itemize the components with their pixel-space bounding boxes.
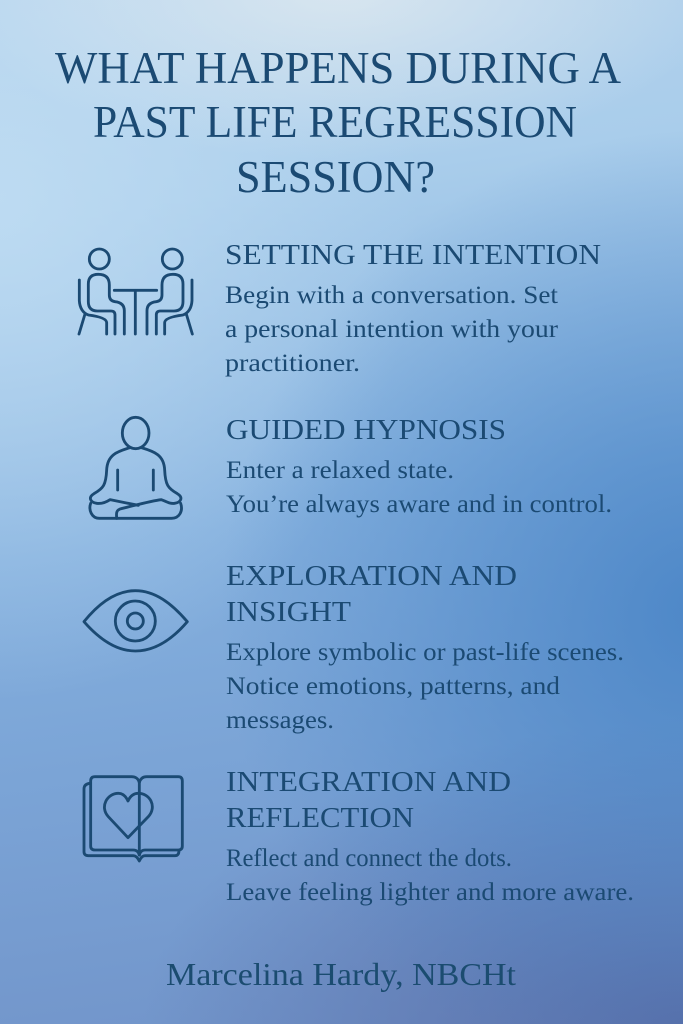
title: PAST LIFE REGRESSION [93, 97, 577, 147]
panel: setting the intention [79, 240, 601, 377]
text: exploration description: Notice emotions, patterns, and [226, 671, 560, 700]
icon: two people at a table [79, 249, 192, 334]
text: exploration description: Explore symbolic or past-life scenes. [226, 637, 624, 666]
text: setting the intention description: a personal intention with your [225, 314, 559, 343]
heading: integration and reflection: INTEGRATION AND [226, 767, 511, 798]
panel: guided hypnosis [90, 415, 612, 518]
text: setting the intention description [225, 280, 559, 377]
text: exploration description [226, 637, 624, 734]
text: setting the intention description: Begin with a conversation. Set [225, 280, 558, 309]
footer: author name: Marcelina Hardy, NBCHt [166, 956, 516, 992]
heading: integration and reflection [226, 767, 511, 834]
text: integration description: Leave feeling lighter and more aware. [226, 877, 634, 906]
text: integration description [226, 843, 634, 906]
text: guided hypnosis description [226, 455, 612, 518]
icon: meditating figure [90, 417, 181, 518]
icon: open book with heart [84, 777, 182, 861]
text: exploration description: messages. [226, 705, 334, 734]
panel: integration and reflection [84, 767, 634, 906]
text: guided hypnosis description: Enter a relaxed state. [226, 455, 454, 484]
title: WHAT HAPPENS DURING A [55, 43, 621, 93]
text: guided hypnosis description: You’re always aware and in control. [226, 489, 612, 518]
heading: integration and reflection: REFLECTION [226, 803, 414, 834]
panel: exploration and insight [84, 561, 624, 734]
icon: eye [84, 591, 187, 651]
text: integration description: Reflect and connect the dots. [226, 843, 512, 872]
heading: setting the intention: SETTING THE INTENTION [225, 240, 601, 271]
heading: guided hypnosis: GUIDED HYPNOSIS [226, 415, 506, 446]
heading: exploration and insight: INSIGHT [226, 597, 351, 628]
title [55, 43, 621, 202]
heading: exploration and insight: EXPLORATION AND [226, 561, 517, 592]
title: SESSION? [236, 152, 435, 202]
heading: exploration and insight [226, 561, 517, 628]
text: setting the intention description: practitioner. [225, 348, 360, 377]
